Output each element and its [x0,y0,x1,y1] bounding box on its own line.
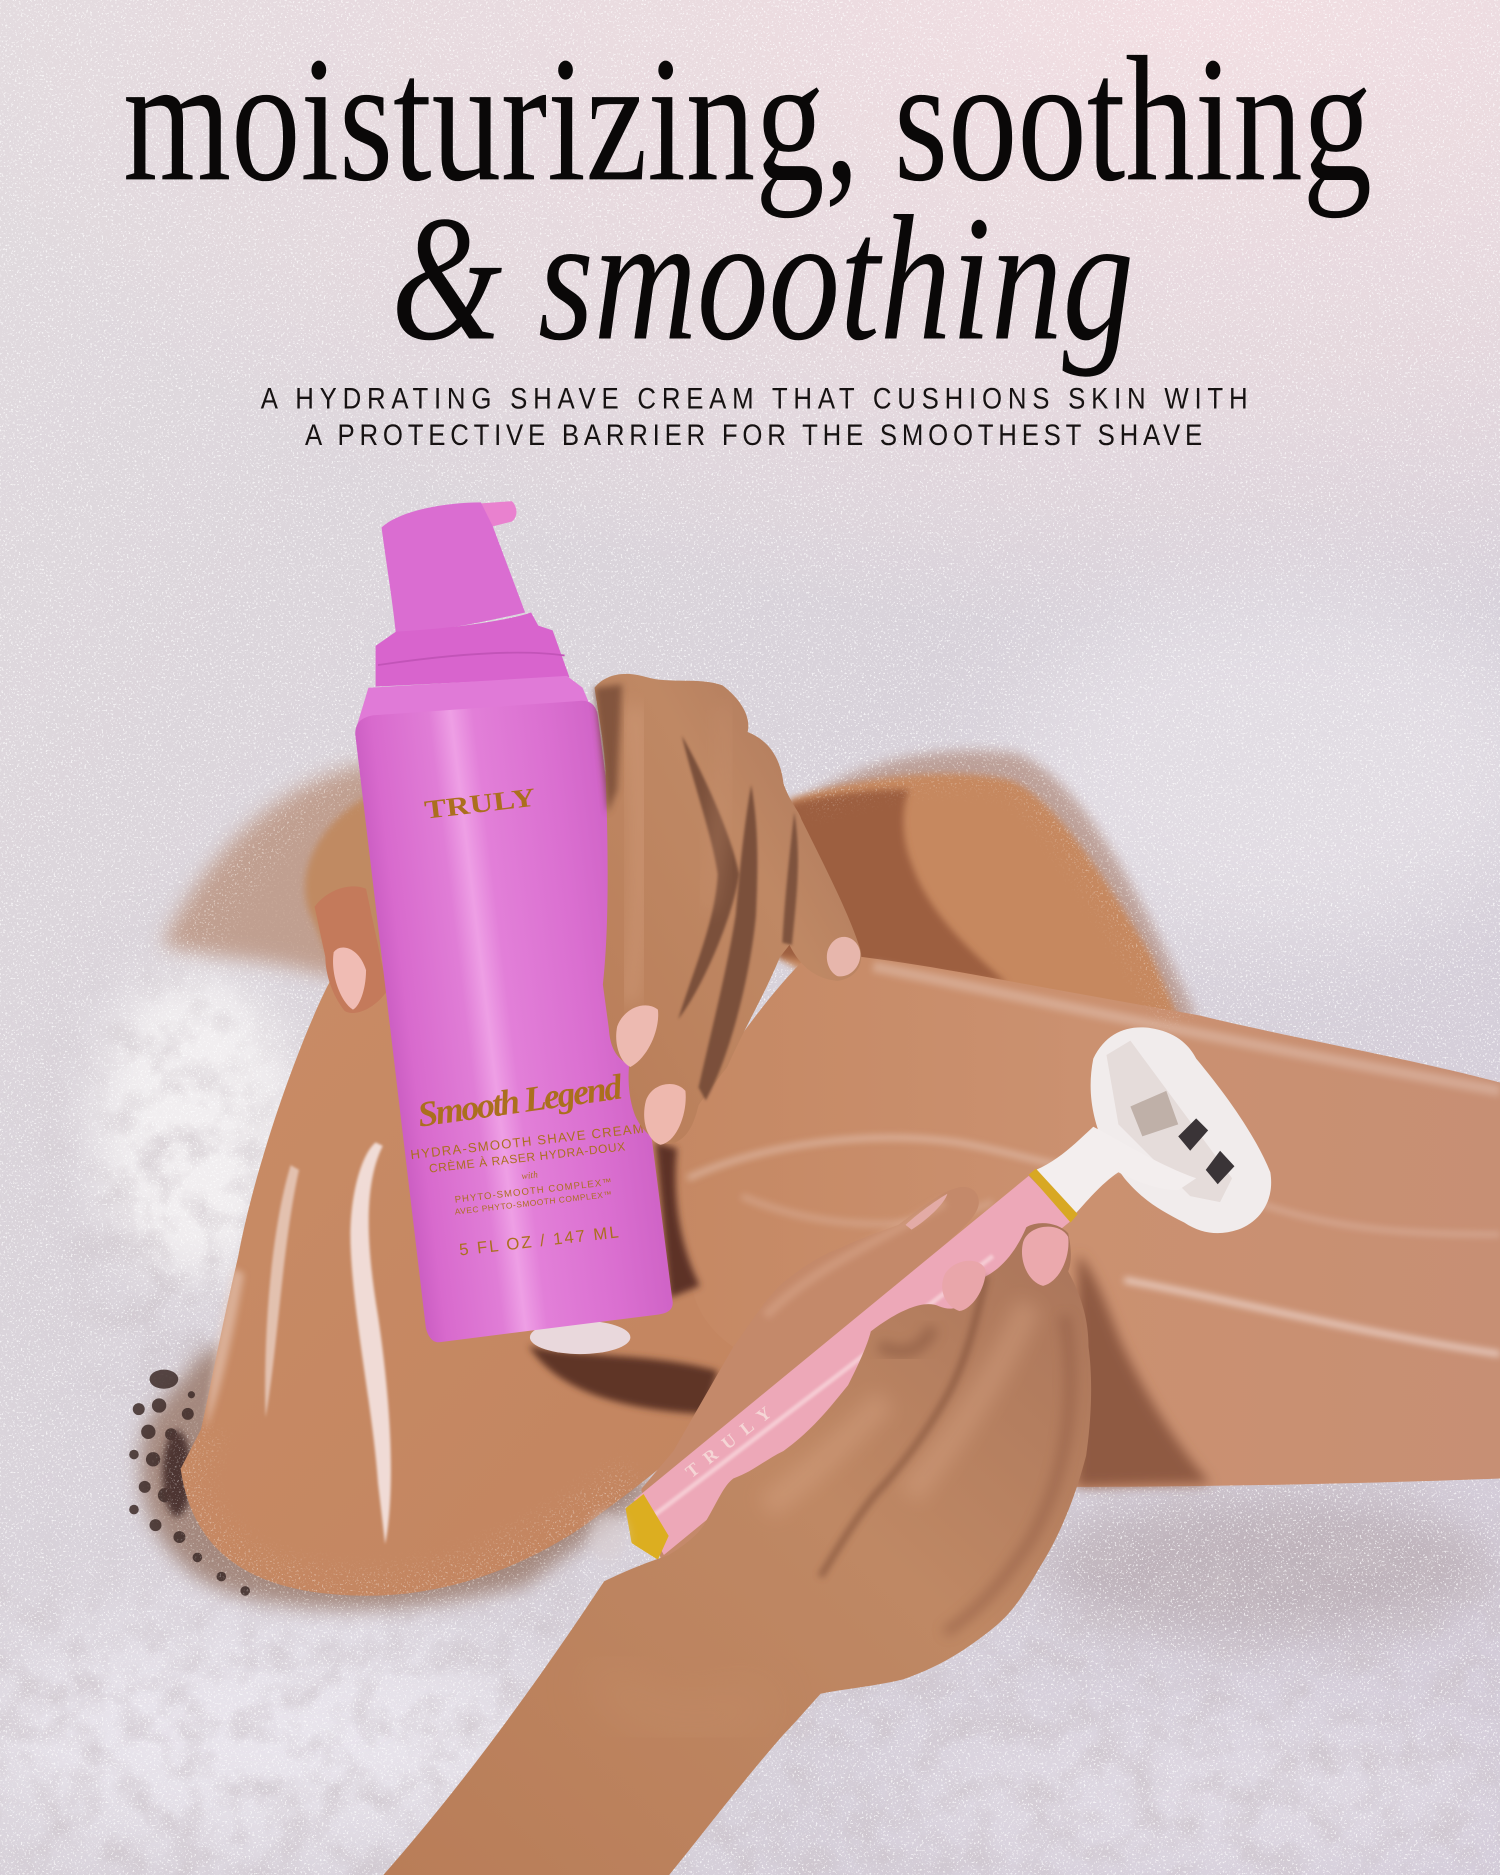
razor [626,1027,1271,1560]
knuckle highlights [628,706,640,1005]
dark bubbles [129,1370,250,1596]
fingernail: index [1022,1227,1068,1286]
hand holding razor with forearm [383,1223,1091,1875]
shadow under bottle [529,1346,718,1414]
French complex line: AVEC PHYTO-SMOOTH COMPLEX™ [454,1189,612,1217]
handle brand: TRULY [682,1403,775,1482]
fingernail: pinky [827,937,860,976]
third cream streak [206,1268,244,1429]
title [123,19,1372,378]
hand gripping the bottle [594,674,861,1145]
finger shading [821,1276,986,1577]
product descriptor: HYDRA-SMOOTH SHAVE CREAM [410,1121,644,1162]
foam water edge around the legs [129,751,1196,1609]
pump nozzle [477,501,516,529]
razor head [1091,1027,1271,1233]
finger crease three [782,812,798,945]
French descriptor: CRÈME À RASER HYDRA-DOUX [428,1138,626,1176]
sparkles along foam edge on skin [148,746,1194,1616]
product name: Smooth Legend [415,1066,626,1135]
subtitle [261,382,1248,451]
gold ring [1029,1169,1078,1222]
foam at bottle base [530,1321,630,1354]
main cream streak [350,1142,391,1544]
razor blades housing [1106,1041,1232,1202]
handle highlight [646,1256,993,1522]
left-hand fingertip behind bottle [315,886,388,1013]
upper collar [376,612,569,687]
lower collar [356,676,593,727]
thumb and forearm behind razor [641,1187,979,1591]
razor neck [1036,1127,1196,1217]
with: with [521,1169,539,1182]
razor handle [634,1176,1072,1555]
subtitle line 1: A HYDRATING SHAVE CREAM THAT CUSHIONS SKIN WITH [261,382,1248,415]
bottle body [355,701,673,1342]
upper bent knee, behind the hand [305,774,1178,1053]
thumbnail [906,1194,947,1230]
subtitle line 2: A PROTECTIVE BARRIER FOR THE SMOOTHEST SHAVE [305,418,1202,451]
dark shadow next to bottle [594,684,622,813]
bottle label text [410,783,644,1259]
complex line: PHYTO-SMOOTH COMPLEX™ [454,1177,612,1206]
razor blades [1178,1118,1208,1151]
right outstretched leg with shave cream streaks [656,951,1500,1487]
left raised thigh [181,957,766,1596]
title line 2: & smoothing [391,179,1134,378]
volume: 5 FL OZ / 147 ML [458,1222,620,1259]
second cream streak [265,1165,299,1417]
fingernail: middle [616,1005,658,1067]
fingernail: ring [644,1084,686,1145]
brand: TRULY: TRULY [423,783,537,825]
finger crease two [699,785,757,1100]
finger crease one [678,736,739,1019]
gold end cap [626,1494,669,1560]
pump stem [382,502,525,634]
product bottle [355,501,673,1354]
fingernail: middle [942,1261,986,1311]
foam around handle end [589,1513,627,1561]
